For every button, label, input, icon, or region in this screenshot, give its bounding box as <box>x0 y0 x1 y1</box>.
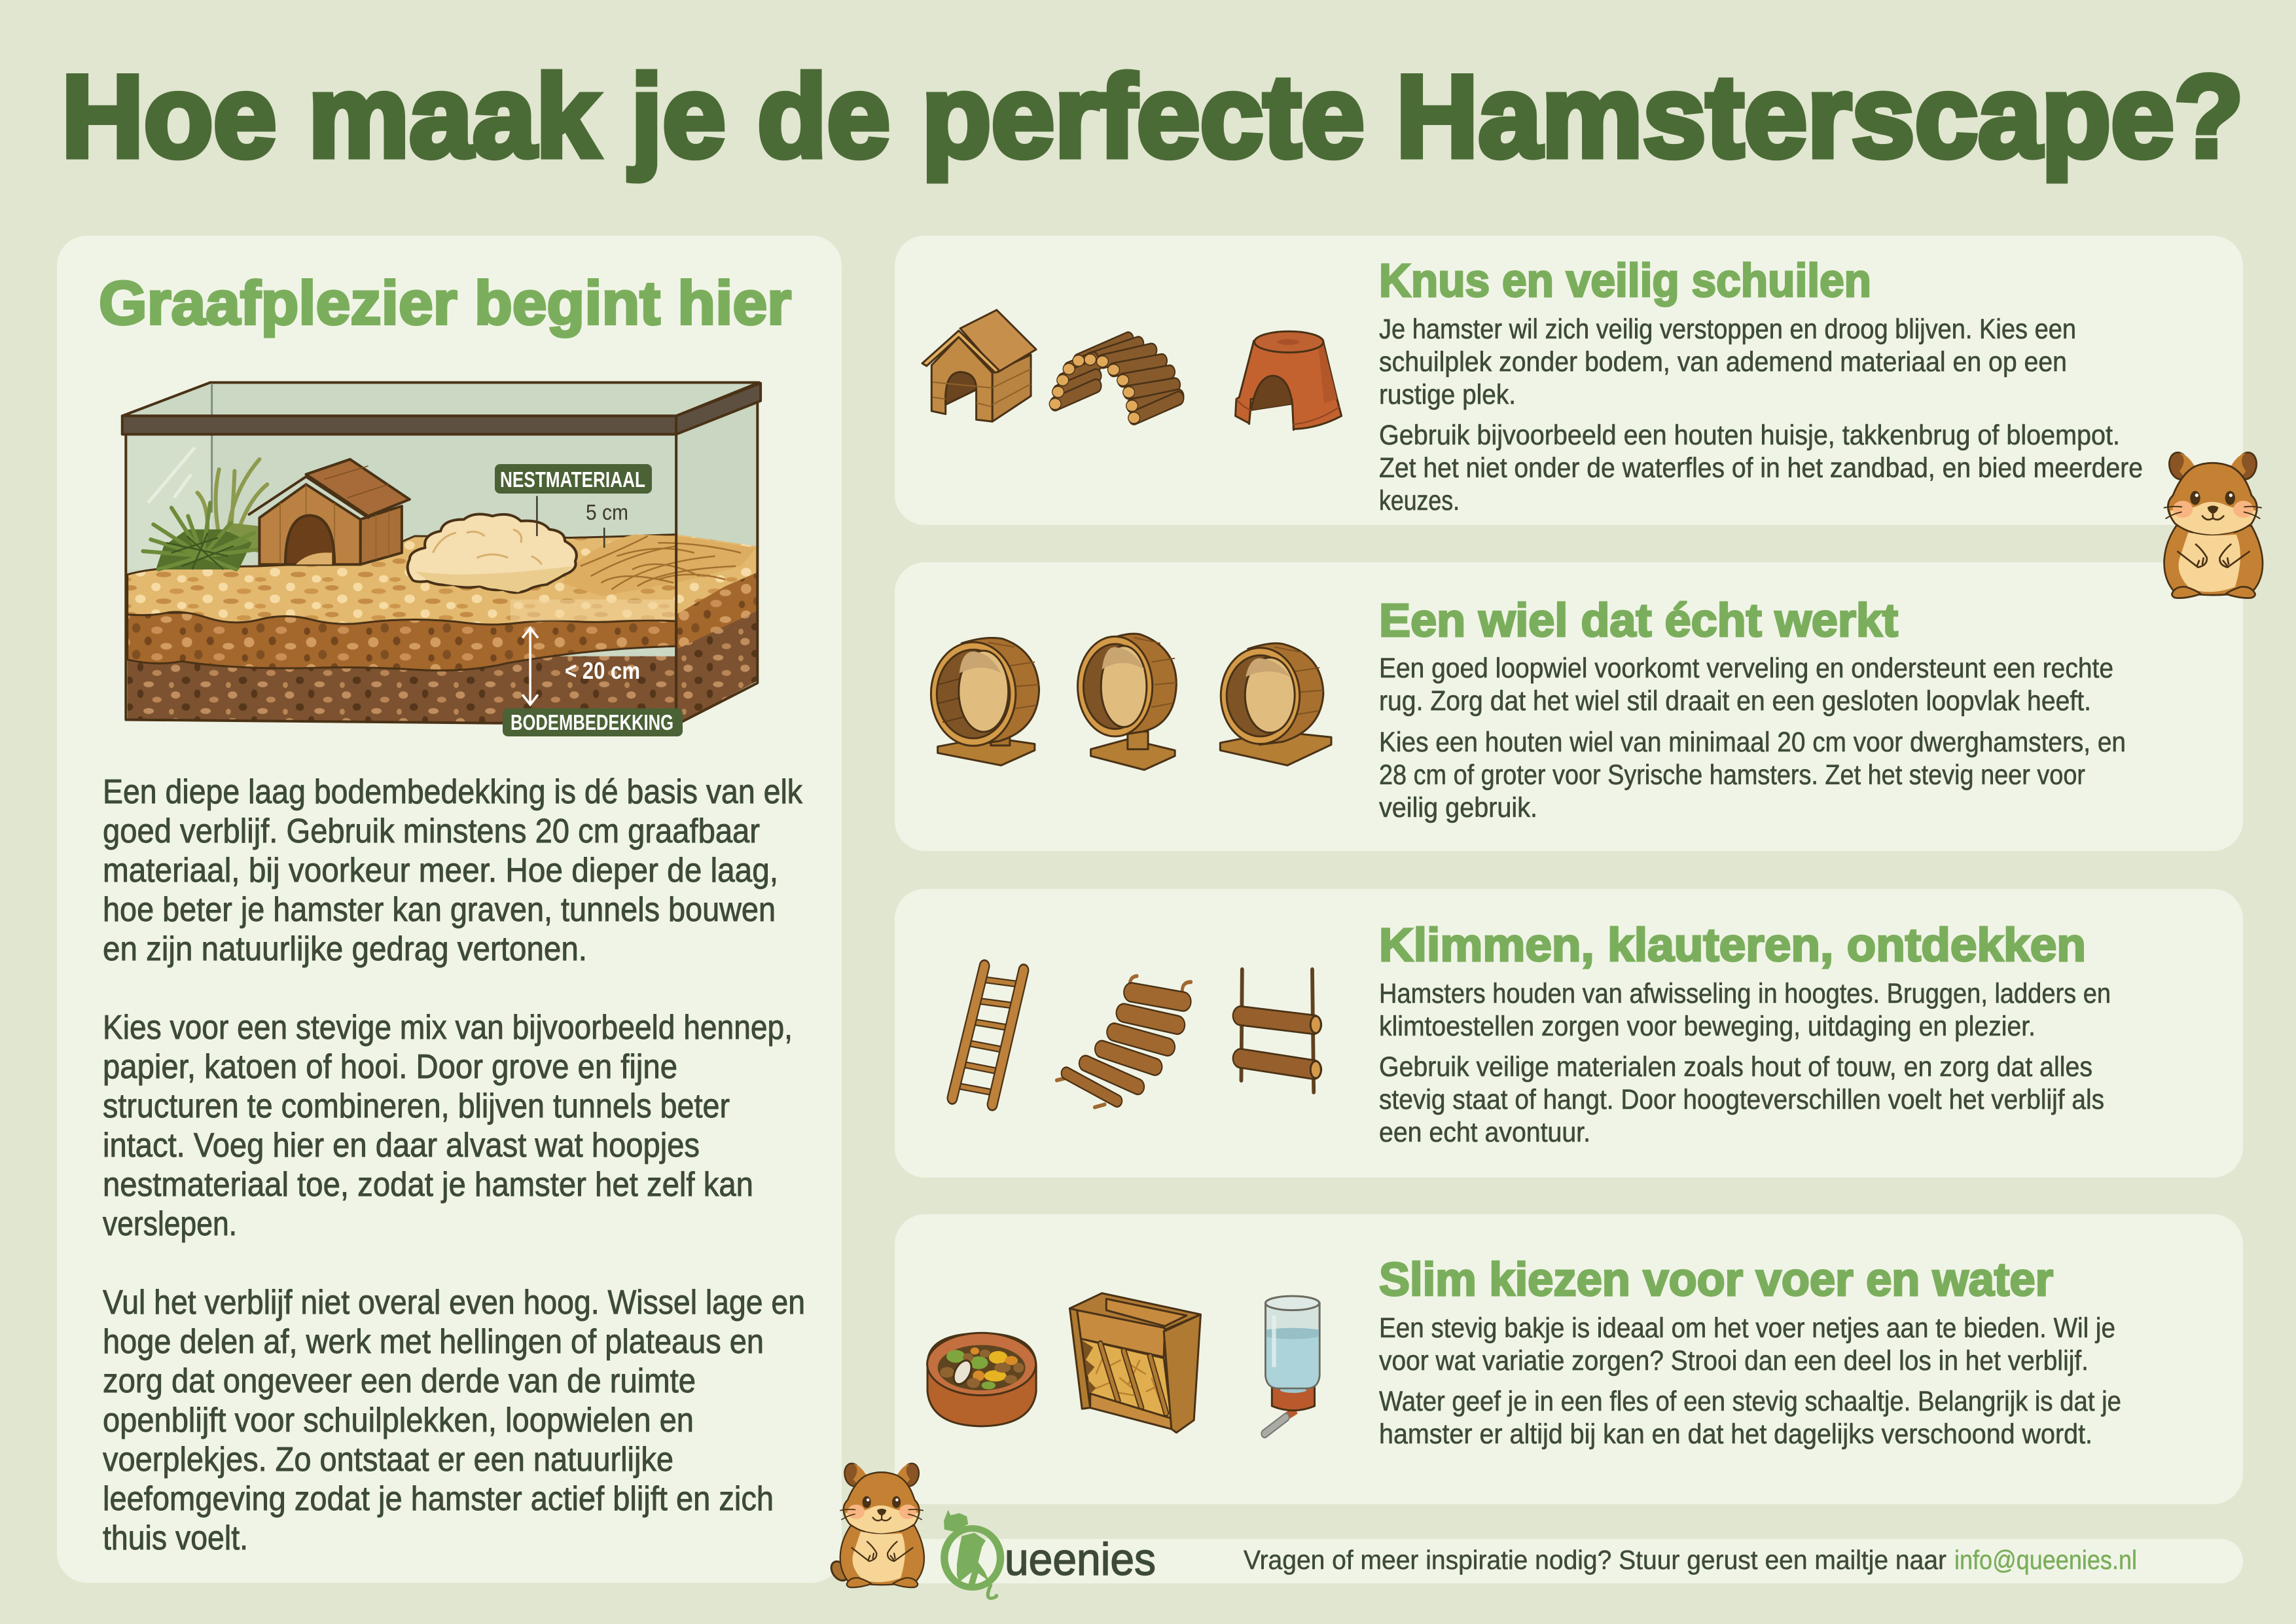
text: wiel uitleg: 28 cm of groter voor Syrische hamsters. Zet het stevig neer voor <box>1379 759 2085 791</box>
text block: materiaalmix: Kies voor een stevige mix van bijvoorbeeld hennep, <box>103 1009 793 1047</box>
icon: log bridge <box>1049 339 1179 424</box>
panel: klimmen klauteren ontdekken <box>895 889 2243 1178</box>
text: klimmen uitleg: een echt avontuur. <box>1379 1117 1590 1148</box>
text: wiel uitleg: Kies een houten wiel van minimaal 20 cm voor dwerghamsters, en <box>1379 727 2126 758</box>
icon: flower pot <box>1236 331 1342 430</box>
logo: queenies <box>944 1510 1156 1598</box>
text block: materiaalmix: intact. Voeg hier en daar alvast wat hoopjes <box>103 1127 700 1164</box>
text block: bodembedekking uitleg: en zijn natuurlijke gedrag vertonen. <box>103 930 587 968</box>
text: klimmen uitleg <box>1379 978 2111 1148</box>
icon: ladder <box>952 966 1024 1104</box>
text block: hoogteverschillen: hoge delen af, werk met hellingen of plateaus en <box>103 1323 764 1361</box>
footer bar <box>895 1539 2243 1583</box>
icon: wheel 1 <box>931 638 1039 765</box>
hay pile <box>562 534 757 596</box>
panel: graafplezier <box>57 236 842 1583</box>
footer email: info@queenies.nl <box>1954 1545 2137 1575</box>
text block: bodembedekking uitleg: materiaal, bij voorkeur meer. Hoe dieper de laag, <box>103 852 778 890</box>
text: schuilplek uitleg <box>1379 314 2143 516</box>
text block: materiaalmix <box>103 1009 793 1243</box>
icon: water bottle <box>1265 1296 1319 1434</box>
text: voer en water uitleg <box>1379 1312 2121 1450</box>
text: voer en water uitleg: Een stevig bakje is ideaal om het voer netjes aan te bieden. Wil je <box>1379 1312 2115 1344</box>
text: schuilplek uitleg: rustige plek. <box>1379 379 1516 410</box>
panel: slim kiezen voor voer en water <box>895 1214 2243 1504</box>
text block: bodembedekking uitleg: Een diepe laag bodembedekking is dé basis van elk <box>103 773 803 811</box>
text block: hoogteverschillen: voerplekjes. Zo ontstaat er een natuurlijke <box>103 1441 673 1479</box>
icon: wooden house <box>922 310 1036 422</box>
text block: hoogteverschillen: openblijft voor schuilplekken, loopwielen en <box>103 1401 694 1439</box>
text: klimmen uitleg: Hamsters houden van afwisseling in hoogtes. Bruggen, ladders en <box>1379 978 2111 1009</box>
text: voer en water uitleg: hamster er altijd bij kan en dat het dagelijks verschoond wordt. <box>1379 1418 2092 1450</box>
text: wiel uitleg: rug. Zorg dat het wiel stil draait en een gesloten loopvlak heeft. <box>1379 685 2091 717</box>
heading: knus en veilig schuilen: Knus en veilig schuilen <box>1379 255 1871 307</box>
text block: bodembedekking uitleg: goed verblijf. Gebruik minstens 20 cm graafbaar <box>103 812 760 850</box>
icon: rope ladder <box>1241 969 1321 1092</box>
text block: materiaalmix: structuren te combineren, blijven tunnels beter <box>103 1087 730 1125</box>
heading: slim kiezen: Slim kiezen voor voer en water <box>1379 1254 2053 1306</box>
title: Hoe maak je de perfecte Hamsterscape? <box>62 51 2244 181</box>
label: nestmateriaal <box>495 464 652 494</box>
text: schuilplek uitleg: Zet het niet onder de waterfles of in het zandbad, en bied meerdere <box>1379 452 2143 484</box>
text: schuilplek uitleg: Je hamster wil zich veilig verstoppen en droog blijven. Kies een <box>1379 314 2076 345</box>
label: bodembedekking: BODEMBEDEKKING <box>511 710 673 734</box>
footer text: Vragen of meer inspiratie nodig? Stuur gerust een mailtje naar <box>1244 1545 1946 1575</box>
text block: bodembedekking uitleg: hoe beter je hamster kan graven, tunnels bouwen <box>103 891 776 929</box>
logo mark <box>944 1510 1001 1598</box>
icon: food bowl <box>927 1333 1036 1426</box>
text: voer en water uitleg: voor wat variatie zorgen? Strooi dan een deel los in het verblijf. <box>1379 1345 2089 1377</box>
illustration: tank with substrate layers <box>122 382 761 736</box>
panel: een wiel dat echt werkt <box>895 562 2243 851</box>
tank frame <box>126 434 676 725</box>
hamster bottom <box>828 1462 924 1587</box>
icon: hay rack <box>1069 1293 1200 1433</box>
text block: hoogteverschillen <box>103 1284 805 1557</box>
text: wiel uitleg: veilig gebruik. <box>1379 792 1537 823</box>
text block: materiaalmix: papier, katoen of hooi. Door grove en fijne <box>103 1048 677 1086</box>
icon: wheel 2 <box>1078 634 1176 770</box>
text: schuilplek uitleg: schuilplek zonder bodem, van ademend materiaal en op een <box>1379 346 2067 378</box>
house in tank <box>361 506 402 564</box>
text block: materiaalmix: nestmateriaal toe, zodat je hamster het zelf kan <box>103 1166 753 1204</box>
icon: wheel 3 <box>1220 643 1331 765</box>
heading: een wiel: Een wiel dat écht werkt <box>1379 595 1898 647</box>
text block: bodembedekking uitleg <box>103 773 803 968</box>
icon: rope bridge <box>1056 976 1191 1108</box>
text: klimmen uitleg: stevig staat of hangt. Door hoogteverschillen voelt het verblijf als <box>1379 1084 2104 1115</box>
label: bodembedekking <box>503 708 683 736</box>
text block: hoogteverschillen: leefomgeving zodat je hamster actief blijft en zich <box>103 1480 774 1518</box>
nest material <box>408 514 577 592</box>
front plant <box>156 530 252 569</box>
text: klimmen uitleg: Gebruik veilige materialen zoals hout of touw, en zorg dat alles <box>1379 1051 2092 1083</box>
text block: hoogteverschillen: zorg dat ongeveer een derde van de ruimte <box>103 1362 696 1400</box>
hamster top right <box>2164 450 2263 598</box>
text: klimmen uitleg: klimtoestellen zorgen voor beweging, uitdaging en plezier. <box>1379 1011 2036 1042</box>
text block: materiaalmix: verslepen. <box>103 1205 237 1243</box>
heading: klimmen: Klimmen, klauteren, ontdekken <box>1379 920 2086 971</box>
label: 20 cm: < 20 cm <box>565 657 640 684</box>
heading: graafplezier begint hier: Graafplezier begint hier <box>99 268 791 337</box>
text: schuilplek uitleg: keuzes. <box>1379 485 1460 516</box>
panel: knus en veilig schuilen <box>895 236 2243 525</box>
label: 5 cm: 5 cm <box>586 500 628 524</box>
text block: hoogteverschillen: thuis voelt. <box>103 1519 248 1557</box>
text: voer en water uitleg: Water geef je in een fles of een stevig schaaltje. Belangrijk is dat je <box>1379 1386 2121 1417</box>
back plant <box>197 460 267 530</box>
text: schuilplek uitleg: Gebruik bijvoorbeeld een houten huisje, takkenbrug of bloempot. <box>1379 420 2120 451</box>
text block: hoogteverschillen: Vul het verblijf niet overal even hoog. Wissel lage en <box>103 1284 805 1322</box>
text: wiel uitleg <box>1379 653 2126 823</box>
label: nestmateriaal: NESTMATERIAAL <box>500 467 645 492</box>
text: wiel uitleg: Een goed loopwiel voorkomt verveling en ondersteunt een rechte <box>1379 653 2113 684</box>
logo wordmark: ueenies <box>1005 1534 1156 1585</box>
